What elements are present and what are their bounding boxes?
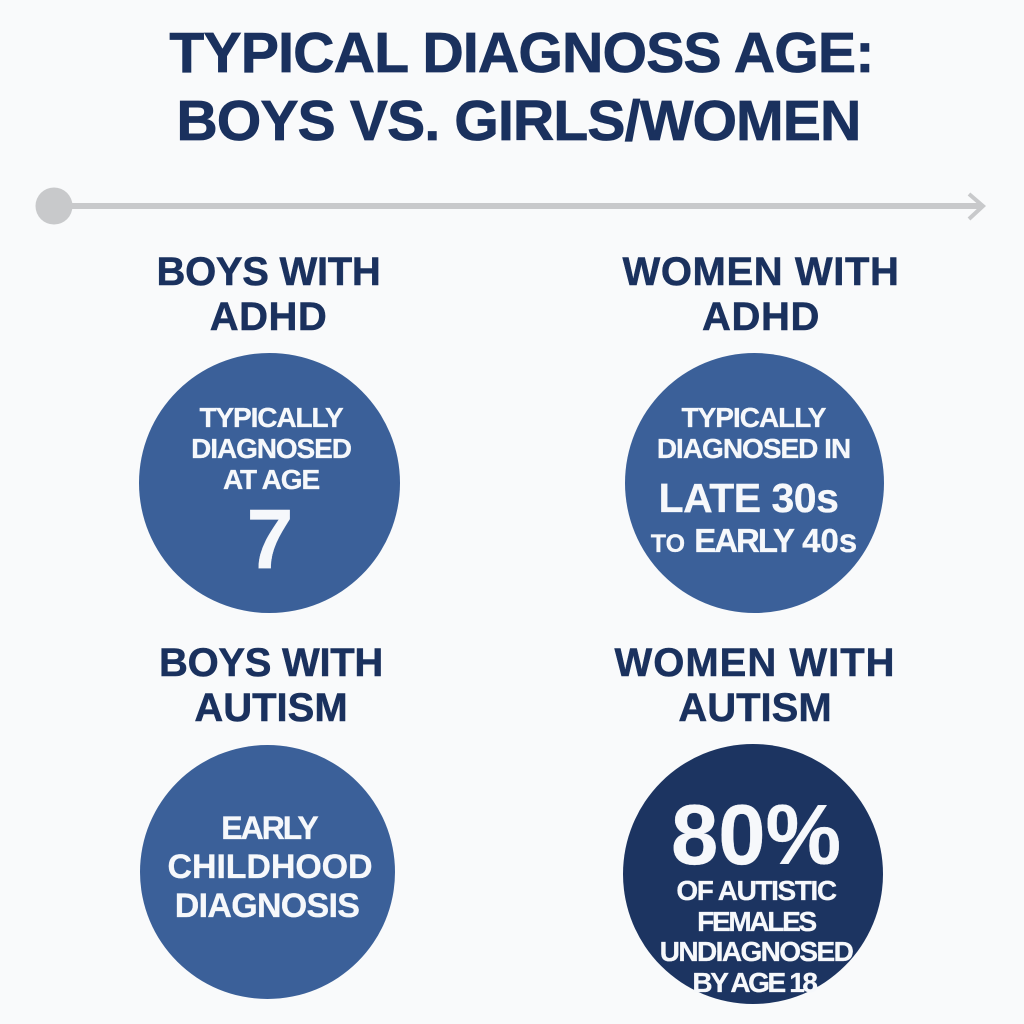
circle text xyxy=(168,810,372,925)
heading: women with ADHD: ADHD xyxy=(702,295,820,339)
panel: boys ADHD circle xyxy=(139,353,400,613)
age range: LATE 30s xyxy=(659,475,838,521)
heading: women with autism xyxy=(614,641,896,730)
panel: women ADHD circle xyxy=(625,353,884,613)
panel: boys autism circle xyxy=(140,745,395,999)
heading: women with autism: AUTISM xyxy=(678,686,832,730)
circle text: DIAGNOSED xyxy=(191,433,351,464)
heading: boys with ADHD xyxy=(157,250,380,339)
title xyxy=(169,21,874,153)
heading: women with ADHD: WOMEN WITH xyxy=(622,250,900,294)
circle text: EARLY xyxy=(221,810,317,846)
heading: boys with autism: BOYS WITH xyxy=(159,641,383,685)
timeline arrow xyxy=(36,188,986,224)
heading: boys with ADHD: BOYS WITH xyxy=(157,250,380,294)
age range end: TO EARLY 40s xyxy=(651,522,857,559)
title: TYPICAL DIAGNOSS AGE: xyxy=(169,21,874,85)
heading: women with autism: WOMEN WITH xyxy=(614,641,896,685)
circle text: TYPICALLY xyxy=(199,402,343,433)
number 7: 7 xyxy=(247,492,293,586)
circle text: OF AUTISTIC xyxy=(676,875,836,906)
heading: women with ADHD xyxy=(622,250,900,339)
circle text xyxy=(191,402,351,495)
circle text xyxy=(660,875,853,998)
circle text: CHILDHOOD xyxy=(168,848,372,886)
circle text: UNDIAGNOSED xyxy=(660,936,852,967)
circle text: TYPICALLY xyxy=(681,402,825,433)
circle text xyxy=(657,402,850,464)
heading: boys with autism xyxy=(159,641,383,730)
panel: women autism circle xyxy=(623,744,883,1004)
circle text: BY AGE 18 xyxy=(692,966,816,998)
circle text: AT AGE xyxy=(223,464,319,495)
circle text: DIAGNOSIS xyxy=(175,887,359,925)
heading: boys with ADHD: ADHD xyxy=(210,295,327,339)
circle text: DIAGNOSED IN xyxy=(657,433,850,464)
circle text: FEMALES xyxy=(697,906,815,936)
statistic: 80% xyxy=(671,788,841,883)
heading: boys with autism: AUTISM xyxy=(194,686,348,730)
title: BOYS VS. GIRLS/WOMEN xyxy=(177,89,860,153)
